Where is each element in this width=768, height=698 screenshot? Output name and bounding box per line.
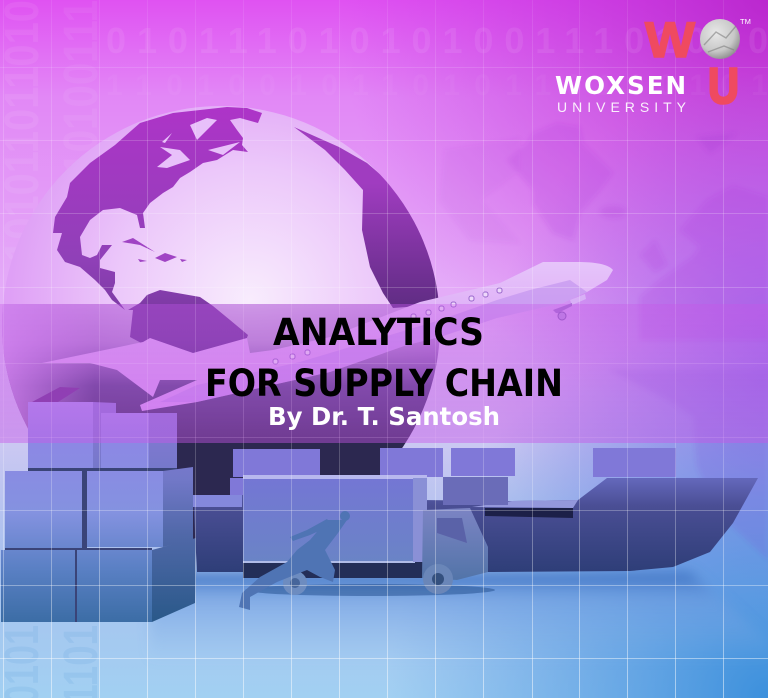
top box right [101,413,149,468]
logo letter U: U [708,58,739,114]
ground shadow [245,584,495,596]
logo wordmark: WOXSEN [555,71,688,100]
hull [193,478,758,572]
cargo ship [193,448,758,572]
globe [0,106,445,549]
containers [230,448,676,505]
plane belly shading [160,280,587,402]
logo globe ball [700,19,740,59]
bottom box left [1,550,75,622]
delivery truck [243,475,495,596]
floor shadow [150,572,768,662]
lakes and bays [157,118,240,168]
deck [472,500,578,508]
svalbard [697,133,737,153]
iberia and north africa strip [294,127,445,308]
front wheel [423,564,453,594]
cab window [437,518,467,543]
title: FOR SUPPLY CHAIN [205,362,563,405]
arctic canada [440,138,520,243]
title [205,311,563,405]
bottom box right [77,550,152,622]
landing gear [553,294,586,320]
logo letter W: W [645,12,696,68]
globe shading inside banner [0,304,445,549]
title: ANALYTICS [273,311,484,354]
logo: Woxsen University [555,12,751,115]
cab [422,508,488,580]
cargo box [243,477,413,563]
south america [128,290,248,360]
trademark: TM [740,17,751,26]
running man [239,511,350,610]
title banner [0,304,768,443]
logo subline: UNIVERSITY [557,99,687,115]
north america [53,107,262,310]
europe [640,186,768,340]
windows [273,288,502,364]
author byline: By Dr. T. Santosh [268,402,500,431]
rear wheel [283,571,307,595]
british isles [640,240,667,272]
greenland [507,123,613,240]
airplane [42,262,613,411]
caribbean islands [122,238,187,262]
top box left [28,402,93,468]
africa [610,370,768,560]
gaps between boxes [5,468,177,622]
middle box right [87,471,163,547]
chassis [243,562,423,578]
faint world map [440,123,768,560]
middle box left [5,471,82,548]
binary digits background: 0101110101010011101010 [106,20,768,61]
box flap [32,387,80,402]
plane body and tail [42,262,613,411]
stacked cardboard boxes [1,387,196,622]
binary digits background: 1101001011010110100101 [106,69,768,102]
iceland [600,206,626,218]
